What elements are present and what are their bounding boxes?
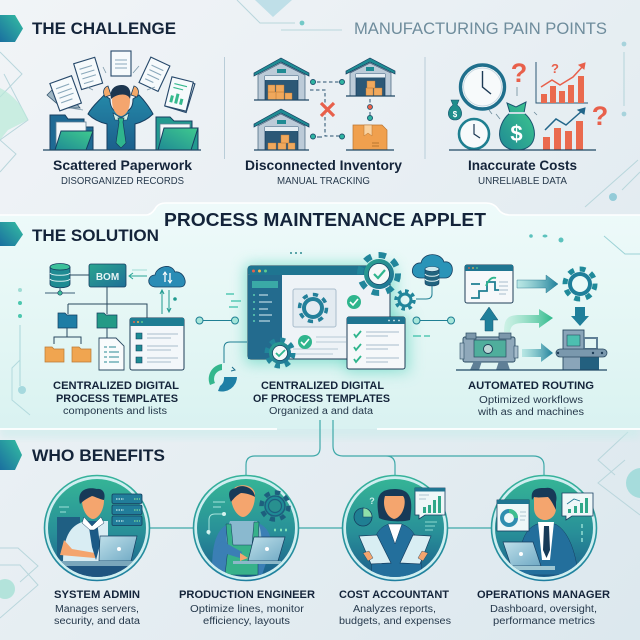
folders — [50, 115, 93, 150]
icon: sync loop — [209, 342, 247, 392]
diagram: BOM template tree: BOM — [96, 272, 119, 283]
label: centralized digital of process templates — [253, 380, 390, 417]
icon: inaccurate costs: ? — [592, 101, 608, 131]
box — [346, 125, 394, 150]
persona label: production engineer: efficiency, layouts — [203, 616, 290, 627]
sublabel: manual tracking: MANUAL TRACKING — [277, 176, 370, 187]
engineer gear — [262, 492, 288, 520]
icon: inaccurate costs — [448, 58, 608, 150]
persona: operations manager — [492, 476, 596, 580]
panel: the solution — [0, 203, 640, 438]
large gear — [360, 255, 398, 293]
routing window — [465, 265, 513, 303]
diagram: automated routing — [456, 265, 607, 370]
icon: disconnected inventory — [254, 58, 395, 150]
persona label: system admin: security, and data — [54, 616, 140, 627]
label: centralized digital process templates: CENTRALIZED DIGITAL — [53, 380, 179, 392]
persona label: cost accountant: Analyzes reports, — [353, 604, 436, 615]
connector right — [413, 317, 454, 336]
heading: the challenge: THE CHALLENGE — [32, 19, 176, 38]
persona label: production engineer — [179, 589, 315, 627]
persona: production engineer — [194, 476, 298, 580]
label: centralized digital of process templates: Organized a and data — [269, 406, 373, 417]
dashboard window — [497, 500, 529, 531]
label: scattered paperwork: Scattered Paperwork — [53, 157, 192, 173]
section tab: the solution — [0, 222, 23, 246]
chart bubble — [562, 493, 593, 520]
machine right — [556, 330, 607, 370]
persona: system admin — [44, 476, 150, 580]
arrows — [517, 275, 558, 293]
persona: cost accountant — [342, 476, 448, 580]
chart upper — [536, 62, 588, 103]
BOM box — [89, 264, 126, 287]
database — [50, 264, 70, 288]
persona label: operations manager: performance metrics — [493, 616, 595, 627]
server stack — [112, 494, 142, 526]
label: automated routing: AUTOMATED ROUTING — [468, 380, 594, 392]
section tab: who benefits — [0, 440, 22, 470]
persona label: system admin: SYSTEM ADMIN — [54, 589, 140, 601]
chart lower — [543, 108, 585, 150]
checklist window — [347, 317, 405, 369]
label: automated routing: with as and machines — [477, 407, 584, 418]
label: disconnected inventory: Disconnected Inventory — [245, 157, 402, 173]
icon: inaccurate costs: ? — [551, 61, 559, 76]
warehouse 2 — [254, 109, 309, 150]
label: centralized digital process templates — [53, 380, 179, 417]
folders — [58, 313, 77, 328]
small bag: $ — [453, 110, 458, 119]
small gear — [396, 291, 414, 309]
persona label: cost accountant — [339, 589, 451, 627]
icon: scattered paperwork — [43, 51, 201, 150]
sublabel: unreliable data: UNRELIABLE DATA — [478, 176, 567, 187]
label: centralized digital process templates: PROCESS TEMPLATES — [56, 393, 178, 405]
persona label: system admin: Manages servers, — [55, 604, 139, 615]
document — [99, 338, 124, 370]
check badge — [347, 295, 361, 309]
small clock — [459, 119, 489, 149]
question marks: ? — [511, 58, 527, 88]
heading: manufacturing pain points: MANUFACTURING PAIN POINTS — [354, 19, 607, 38]
persona label: cost accountant: budgets, and expenses — [339, 616, 451, 627]
panel decoration — [12, 234, 640, 415]
routing gear — [565, 269, 595, 299]
heading: the solution: THE SOLUTION — [32, 226, 159, 245]
persona label: production engineer: PRODUCTION ENGINEER — [179, 589, 315, 601]
section tab: the challenge — [0, 15, 23, 42]
icon: cloud database — [396, 255, 452, 309]
heading: process maintenance applet: PROCESS MAINTENANCE APPLET — [164, 210, 486, 230]
persona label: system admin — [54, 589, 140, 627]
divider — [224, 57, 425, 159]
persona label: operations manager: Dashboard, oversight, — [490, 604, 597, 615]
warehouse 3 — [346, 58, 395, 96]
persona: cost accountant: ? — [369, 496, 375, 506]
template window — [130, 318, 184, 370]
label: automated routing — [468, 380, 594, 418]
label: centralized digital of process templates: OF PROCESS TEMPLATES — [253, 393, 390, 405]
person — [88, 95, 153, 150]
persona label: operations manager: OPERATIONS MANAGER — [477, 589, 610, 601]
machine left — [460, 333, 518, 370]
label: inaccurate costs: Inaccurate Costs — [468, 157, 577, 173]
label: automated routing: Optimized workflows — [479, 395, 583, 406]
warehouse 1 — [254, 58, 309, 100]
connector tree — [150, 420, 544, 528]
big bag: $ — [510, 121, 523, 146]
cloud — [149, 266, 185, 287]
big bag — [500, 102, 534, 150]
connector left — [196, 294, 241, 324]
label: centralized digital process templates: components and lists — [63, 406, 167, 417]
centre gear — [300, 294, 326, 322]
persona label: production engineer: Optimize lines, monitor — [190, 604, 305, 615]
persona label: operations manager — [477, 589, 610, 627]
lower gear — [267, 340, 293, 366]
persona label: cost accountant: COST ACCOUNTANT — [339, 589, 449, 601]
heading: who benefits: WHO BENEFITS — [32, 446, 165, 465]
dashed links — [310, 82, 370, 136]
small bag — [448, 100, 462, 120]
big clock — [460, 65, 504, 109]
pie chart — [354, 508, 372, 526]
diagram: BOM template tree — [45, 264, 185, 370]
check badge lower — [298, 335, 312, 349]
label: centralized digital of process templates: CENTRALIZED DIGITAL — [261, 380, 384, 392]
chart bubble — [415, 488, 445, 519]
sublabel: disorganized records: DISORGANIZED RECORDS — [61, 176, 184, 187]
central applet window — [245, 255, 410, 373]
